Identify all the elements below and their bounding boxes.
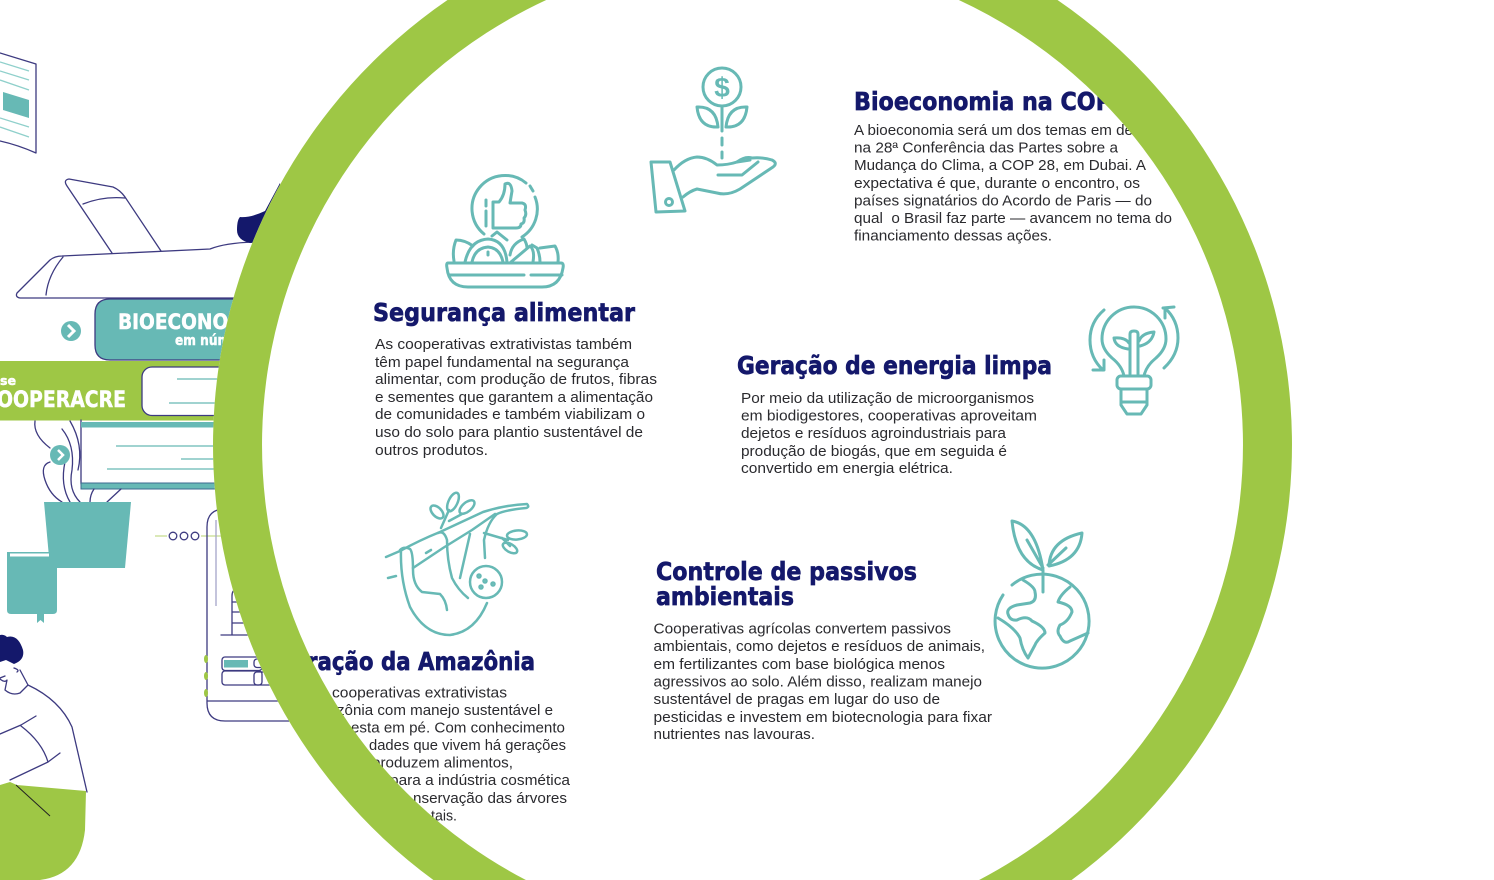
text: controle de passivos: sustentável de pragas em lugar do uso de <box>654 692 940 708</box>
plant with pot <box>35 421 131 568</box>
button: bioeconomia em números: em números <box>175 333 260 349</box>
text: segurança alimentar: têm papel fundamental na segurança <box>375 355 630 371</box>
button: bioeconomia em números: BIOECONOMIA <box>118 310 269 334</box>
text: preservação da amazônia: para a indústria cosmética <box>390 773 571 789</box>
icon: light bulb with arrows <box>1090 307 1178 414</box>
heading: bioeconomia na cop: Bioeconomia na COP <box>854 87 1112 116</box>
ring: right arc <box>959 0 1292 880</box>
text: preservação da amazônia: esta em pé. Com conhecimento <box>351 720 565 736</box>
heading: controle de passivos ambientais: Controle de passivos <box>656 557 917 586</box>
text: preservação da amazônia <box>332 686 571 824</box>
teal book <box>7 552 57 623</box>
text: segurança alimentar: alimentar, com produção de frutos, fibras <box>375 372 657 388</box>
text: segurança alimentar: de comunidades e também viabilizam o <box>375 407 645 423</box>
text: controle de passivos: pesticidas e investem em biotecnologia para fixar <box>654 710 992 726</box>
heading: controle de passivos ambientais <box>656 557 917 611</box>
text: bioeconomia na cop: qual o Brasil faz parte — avancem no tema do <box>854 211 1172 227</box>
heading: preservação da amazônia: ração da Amazônia <box>307 647 535 676</box>
text: segurança alimentar <box>375 337 657 459</box>
green ring <box>213 0 1292 880</box>
open book top <box>0 53 36 153</box>
text: bioeconomia na cop: financiamento dessas ações. <box>854 229 1052 245</box>
text: preservação da amazônia: cooperativas extrativistas <box>332 686 507 702</box>
text: preservação da amazônia: nservação das árvores <box>413 791 567 807</box>
text: preservação da amazônia: produzem alimentos, <box>372 756 513 772</box>
button: bioeconomia em números <box>61 299 300 360</box>
plane shaped book <box>16 179 286 298</box>
text: bioeconomia na cop: na 28ª Conferência das Partes sobre a <box>854 141 1119 157</box>
white disc <box>213 0 1292 880</box>
heading: geração de energia limpa: Geração de energia limpa <box>737 351 1052 380</box>
text: controle de passivos <box>654 622 992 743</box>
text: segurança alimentar: As cooperativas extrativistas também <box>375 337 632 353</box>
text: geração de energia limpa: convertido em energia elétrica. <box>741 461 953 477</box>
green bar: cooperacre <box>0 361 298 420</box>
phone <box>204 509 300 721</box>
icon: money plant in hand: $ <box>714 72 730 103</box>
text: geração de energia limpa: produção de biogás, que em seguida é <box>741 444 1007 460</box>
text: geração de energia limpa: dejetos e resíduos agroindustriais para <box>741 426 1007 442</box>
ring: left arc <box>213 0 546 880</box>
text: preservação da amazônia: dades que vivem há gerações <box>369 738 566 754</box>
dots connector <box>155 532 222 540</box>
icon: salad with thumbs up <box>447 175 563 287</box>
text: bioeconomia na cop <box>854 123 1172 245</box>
text: bioeconomia na cop: países signatários do Acordo de Paris — do <box>854 194 1152 210</box>
text: preservação da amazônia: zônia com manejo sustentável e <box>337 703 553 719</box>
text: controle de passivos: nutrientes nas lavouras. <box>654 727 815 743</box>
heading: controle de passivos ambientais: ambientais <box>656 582 794 611</box>
text: segurança alimentar: e sementes que garantem a alimentação <box>375 390 653 406</box>
heading: segurança alimentar: Segurança alimentar <box>373 298 636 327</box>
text: bioeconomia na cop: expectativa é que, durante o encontro, os <box>854 176 1140 192</box>
text: bioeconomia na cop: Mudança do Clima, a COP 28, em Dubai. A <box>854 158 1146 174</box>
text: controle de passivos: ambientais, como dejetos e resíduos de animais, <box>654 639 985 655</box>
text: controle de passivos: agressivos ao solo. Além disso, realizam manejo <box>654 674 982 690</box>
text: segurança alimentar: outros produtos. <box>375 443 488 459</box>
text: preservação da amazônia: tais. <box>431 808 457 824</box>
person <box>0 635 87 880</box>
green bar: cooperacre: OOPERACRE <box>0 388 126 413</box>
icon: money plant in hand <box>651 68 775 212</box>
text: geração de energia limpa: Por meio da utilização de microorganismos <box>741 391 1034 407</box>
text: controle de passivos: em fertilizantes com base biológica menos <box>654 657 945 673</box>
green bar: cooperacre: se <box>0 374 16 388</box>
book with lines <box>81 420 281 489</box>
icon: earth with sprout <box>995 521 1089 668</box>
text: geração de energia limpa: em biodigestores, cooperativas aproveitam <box>741 409 1037 425</box>
text: controle de passivos: Cooperativas agrícolas convertem passivos <box>654 622 951 638</box>
left illustration <box>0 53 300 880</box>
text: segurança alimentar: uso do solo para plantio sustentável de <box>375 425 643 441</box>
text: bioeconomia na cop: A bioeconomia será um dos temas em de <box>854 123 1133 139</box>
icon: sloth on branch <box>386 491 528 635</box>
text: geração de energia limpa <box>741 391 1037 477</box>
